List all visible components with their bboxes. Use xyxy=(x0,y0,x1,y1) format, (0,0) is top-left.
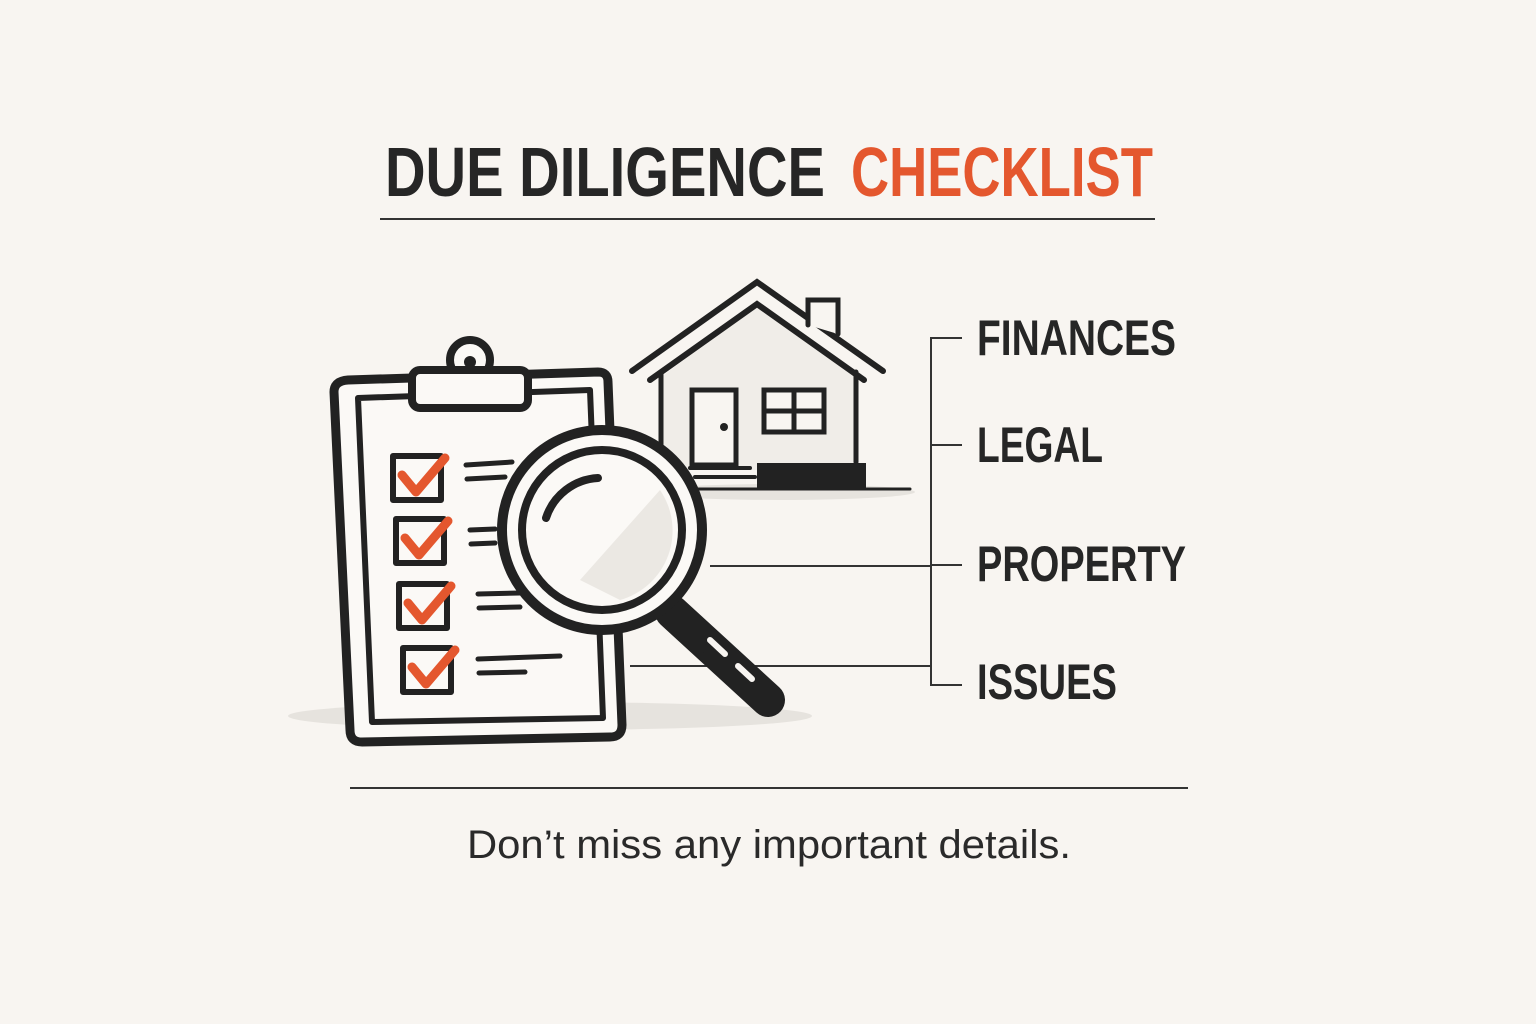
labels: ISSUES xyxy=(977,654,1117,710)
icon: clipboard xyxy=(334,340,622,742)
icon: magnifying glass xyxy=(502,430,768,700)
icon: house xyxy=(632,282,910,489)
labels: LEGAL xyxy=(977,417,1103,473)
subtitle: Don’t miss any important details. xyxy=(467,823,1071,867)
title: CHECKLIST xyxy=(851,133,1153,211)
labels xyxy=(977,310,1186,710)
title: DUE DILIGENCE xyxy=(385,133,825,211)
labels: FINANCES xyxy=(977,310,1176,366)
connector lines xyxy=(630,338,962,685)
checkboxes xyxy=(393,456,451,692)
shadows xyxy=(288,702,812,730)
labels: PROPERTY xyxy=(977,536,1186,592)
